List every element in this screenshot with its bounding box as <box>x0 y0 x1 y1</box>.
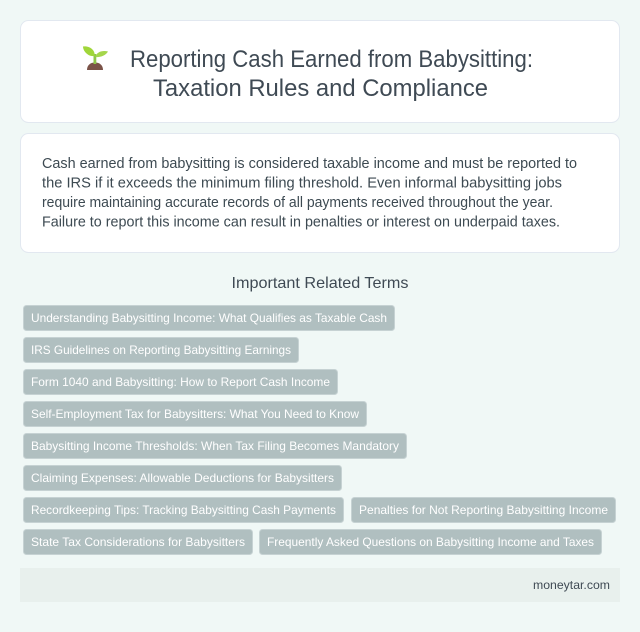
title: Taxation Rules and Compliance <box>153 75 488 102</box>
tag: form 1040: Form 1040 and Babysitting: How to Report Cash Income <box>31 375 330 389</box>
tag: income thresholds: Babysitting Income Thresholds: When Tax Filing Becomes Mandatory <box>31 439 399 453</box>
tag: taxable cash: Understanding Babysitting Income: What Qualifies as Taxable Cash <box>31 311 387 325</box>
summary text: the IRS if it exceeds the minimum filing threshold. Even informal babysitting jobs <box>42 176 562 192</box>
tag: IRS guidelines: IRS Guidelines on Reporting Babysitting Earnings <box>31 343 291 357</box>
tag: state tax: State Tax Considerations for Babysitters <box>31 535 245 549</box>
tag: self-employment tax: Self-Employment Tax for Babysitters: What You Need to Know <box>31 407 359 421</box>
tag: recordkeeping <box>24 498 344 522</box>
tag: FAQ: Frequently Asked Questions on Babysitting Income and Taxes <box>267 535 594 549</box>
tag: claiming expenses <box>24 466 342 490</box>
summary text: Failure to report this income can result in penalties or interest on underpaid taxes. <box>42 214 560 230</box>
footer source: moneytar.com <box>533 578 610 592</box>
tag: FAQ <box>260 530 602 554</box>
tag: claiming expenses: Claiming Expenses: Allowable Deductions for Babysitters <box>31 471 334 485</box>
tag: income thresholds <box>24 434 406 458</box>
title: Reporting Cash Earned from Babysitting: <box>130 46 533 73</box>
tag: state tax <box>24 530 252 554</box>
panel: summary <box>20 134 620 252</box>
tag: IRS guidelines <box>24 338 298 362</box>
summary text: require maintaining accurate records of all payments received throughout the year. <box>42 195 553 211</box>
tag: penalties: Penalties for Not Reporting Babysitting Income <box>359 503 608 517</box>
tag: form 1040 <box>24 370 338 394</box>
tag: recordkeeping: Recordkeeping Tips: Tracking Babysitting Cash Payments <box>31 503 336 517</box>
footer <box>20 568 620 602</box>
heading: related terms: Important Related Terms <box>232 275 408 292</box>
panel: title card <box>20 20 620 122</box>
summary text: Cash earned from babysitting is considered taxable income and must be reported to <box>42 156 577 172</box>
icon: seedling <box>83 46 108 70</box>
tag: taxable cash <box>24 306 394 330</box>
tag: penalties <box>352 498 616 522</box>
tag: self-employment tax <box>24 402 366 426</box>
